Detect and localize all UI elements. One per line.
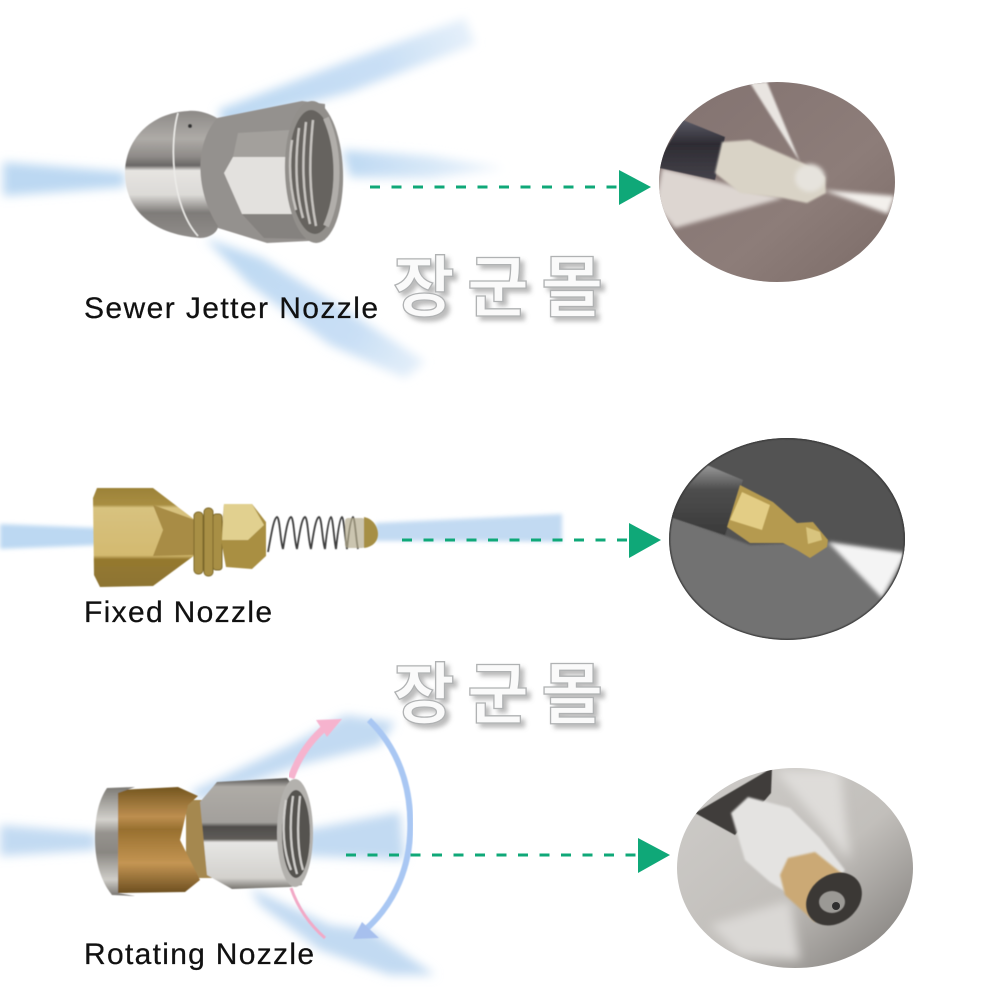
hex steel body <box>200 778 302 889</box>
nozzle fitting <box>715 140 826 203</box>
dark hose <box>695 768 772 835</box>
label: rotating nozzle: Rotating Nozzle <box>84 938 314 971</box>
arrow: fixed to result <box>402 523 661 558</box>
jet <box>828 542 906 598</box>
blue arc <box>365 720 410 930</box>
grooved collar <box>194 508 222 576</box>
arrow: rotating to result <box>346 838 670 873</box>
water jets: fixed nozzle <box>0 514 562 549</box>
hex body <box>195 101 325 243</box>
pink arc upper <box>291 725 328 778</box>
taper shadow <box>153 505 195 556</box>
dome collar edge <box>173 113 198 236</box>
brass body <box>118 787 200 893</box>
rotation arcs <box>291 719 410 939</box>
rear spray <box>655 168 783 228</box>
jet hole <box>188 124 192 128</box>
spring <box>268 517 358 552</box>
arrow: sewer jetter to result <box>370 170 651 205</box>
water jets: rotating nozzle <box>0 715 435 975</box>
label: fixed nozzle: Fixed Nozzle <box>84 596 272 629</box>
pink arc lower <box>291 888 325 938</box>
head hole <box>832 902 840 910</box>
label: sewer jetter nozzle: Sewer Jetter Nozzle <box>84 292 378 325</box>
steel fitting <box>730 796 846 891</box>
brass highlight <box>730 492 770 530</box>
hex lower face <box>242 214 306 239</box>
result photo: rotating nozzle <box>672 765 917 971</box>
watermark: 장군몰 <box>393 658 603 733</box>
head center <box>819 891 845 913</box>
hex top face <box>233 130 290 157</box>
fixed nozzle product <box>93 488 378 587</box>
head ring <box>805 872 863 926</box>
brass band <box>780 852 850 922</box>
watermark: 장군몰 <box>393 251 603 326</box>
tip cap <box>364 517 378 548</box>
bright spray streak <box>775 770 850 860</box>
nozzle tip highlight <box>795 164 825 192</box>
result photo: fixed nozzle <box>664 435 910 645</box>
dark upper background <box>668 436 910 556</box>
tip highlight <box>806 527 822 544</box>
circle rim <box>670 438 904 640</box>
brass nut <box>221 504 266 569</box>
water jets: sewer jetter nozzle <box>3 18 505 378</box>
neck <box>186 800 212 878</box>
brass hex body <box>93 488 195 587</box>
steel cap <box>95 787 135 896</box>
lower spray streak <box>710 900 800 960</box>
rotating nozzle product <box>95 778 313 896</box>
threaded opening <box>283 100 345 244</box>
blue arrowhead <box>353 922 379 939</box>
threaded opening <box>277 779 313 887</box>
forward jet <box>823 190 895 214</box>
hex highlight face <box>224 157 296 214</box>
dome head <box>125 111 218 238</box>
threaded tip <box>345 518 365 548</box>
hose <box>655 120 725 180</box>
result photo: sewer jetter nozzle <box>655 80 900 286</box>
pink arrowhead <box>316 719 342 737</box>
brass tip <box>727 485 828 558</box>
upward jet <box>750 82 800 162</box>
hose <box>664 465 743 535</box>
sewer jetter nozzle product <box>125 100 345 244</box>
